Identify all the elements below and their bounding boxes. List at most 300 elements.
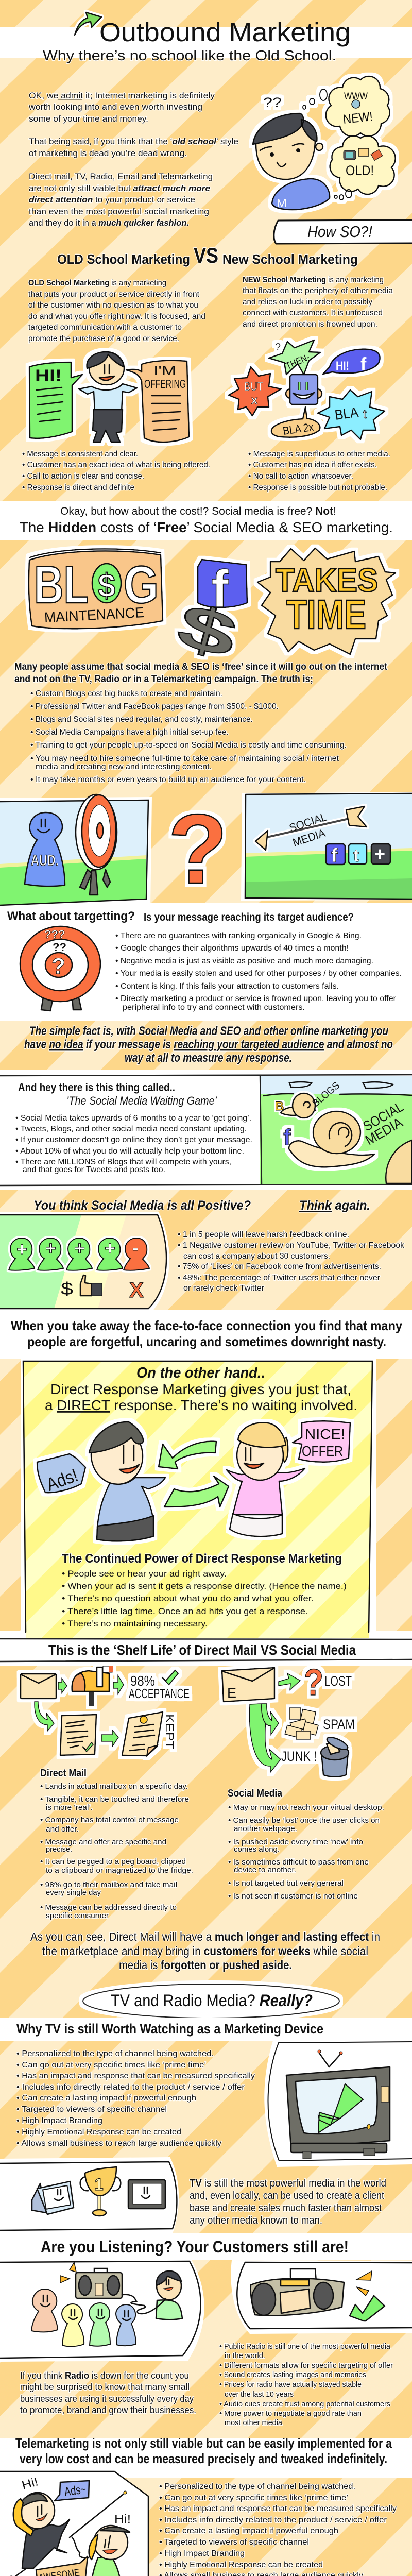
- illustration: man with ads: Ads!: [44, 1465, 81, 1495]
- list: waiting game: • Tweets, Blogs, and other social media need constant updating.: [15, 1125, 247, 1133]
- bubble: hi facebook: [323, 349, 380, 374]
- list: direct mail: • Lands in actual mailbox on a specific day.: [40, 1782, 188, 1791]
- list: tv benefits: • Has an impact and response that can be measured specifically: [16, 2072, 255, 2080]
- text: free assumption: [14, 662, 388, 685]
- illustration: direct speaker with speech boxes: [29, 352, 189, 442]
- panel: reviews figures: +: [105, 1238, 115, 1259]
- bubble: bla twitter: BLA: [334, 404, 359, 423]
- caller: Hi!: [20, 2475, 40, 2492]
- heading: waiting game: [18, 1081, 217, 1107]
- list: telemarketing benefits: • Targeted to viewers of specific channel: [159, 2538, 309, 2547]
- figure: audience: AUD.: [31, 852, 59, 869]
- heading: waiting game: ’The Social Media Waiting Game’: [66, 1094, 217, 1107]
- text: tv powerful: TV is still the most powerful media in the world: [190, 2178, 386, 2189]
- list: waiting game: • About 10% of what you do will actually help your bottom line.: [15, 1147, 244, 1156]
- heading: other hand: On the other hand..: [136, 1365, 265, 1381]
- bubble: bla 2x: BLA 2x: [282, 420, 315, 437]
- heading: hidden costs: [20, 505, 393, 535]
- illustration: snails: SOCIAL: [360, 1099, 406, 1134]
- list: new school traits: [248, 450, 390, 492]
- icons: social networks: +: [374, 843, 385, 865]
- list: direct mail: and offer.: [46, 1825, 79, 1834]
- bubble: bla twitter: t: [363, 408, 367, 421]
- text: radio success: [20, 2370, 196, 2415]
- intro text: OK, we admit it; Internet marketing is definitely: [29, 91, 215, 100]
- text: old school definition: targeted communication with a customer to: [28, 323, 182, 332]
- figure: audience: [25, 812, 65, 886]
- arrows: exchange: [159, 1442, 229, 1507]
- list: waiting game: and that goes for Tweets and posts too.: [23, 1165, 165, 1174]
- list: continued power: • There’s no question about what you do and what you offer.: [62, 1594, 314, 1603]
- list: waiting game: • Social Media takes upwards of 6 months to a year to ‘get going’.: [15, 1114, 251, 1123]
- list: negative stats: • 1 Negative customer review on YouTube, Twitter or Facebook: [178, 1241, 405, 1250]
- text: radio success: businesses are using it successfully every day: [20, 2393, 194, 2404]
- subtitle: Why there’s no school like the Old School.: [43, 47, 336, 63]
- comic panel: audience and target: [0, 794, 152, 908]
- intro text: than even the most powerful social marketing: [29, 207, 209, 216]
- list: tv benefits: • Includes info directly related to the product / service / offer: [16, 2083, 245, 2092]
- intro text: worth looking into and even worth investing: [28, 102, 202, 112]
- person: presenter: [79, 352, 137, 442]
- heading: waiting game: And hey there is this thing called..: [18, 1081, 175, 1094]
- list: waiting game: • There are MILLIONS of Blogs that will compete with yours,: [15, 1158, 231, 1166]
- text: tv powerful: any other media known to man.: [190, 2215, 322, 2226]
- list: old school traits: • Customer has an exact idea of what is being offered.: [22, 461, 210, 469]
- text: old school definition: of the customer with no question as to what you: [28, 301, 198, 310]
- icon: trophy: 1: [94, 2175, 104, 2194]
- icons: social networks: t: [353, 846, 359, 866]
- list: tv benefits: • Targeted to viewers of specific channel: [16, 2105, 167, 2114]
- list: tv benefits: • Highly Emotional Response can be created: [16, 2128, 181, 2137]
- intro text: of marketing is dead you’re dead wrong.: [29, 148, 187, 158]
- list: hidden costs: • Professional Twitter and FaceBook pages range from $500. - $1000.: [30, 702, 279, 711]
- list: direct mail: • Tangible, it can be touched and therefore: [40, 1795, 189, 1804]
- title band: [0, 27, 412, 58]
- list: direct mail: • Company has total control of message: [40, 1816, 179, 1824]
- illustration: woman with nice offer: [227, 1421, 350, 1536]
- list: radio benefits: in the world.: [225, 2351, 265, 2360]
- text: new school definition: and direct promotion is frowned upon.: [243, 320, 377, 329]
- text: tv powerful: base and create sales much faster than almost: [190, 2202, 382, 2214]
- icon: big question mark: ?: [168, 793, 228, 904]
- label: lost: ?: [304, 1662, 323, 1703]
- label: social media: [287, 810, 328, 849]
- summary text: lasting effect: As you can see, Direct Mail will have a much longer and lasting effect in: [30, 1930, 380, 1943]
- list: hidden costs: • It may take months or even years to build up an audience for your content.: [30, 775, 306, 784]
- title: Outbound Marketing: [99, 18, 351, 47]
- list: social media: • May or may not reach your virtual desktop.: [228, 1803, 384, 1812]
- list: tv benefits: • Allows small business to reach large audience quickly: [16, 2139, 221, 2148]
- list: tv benefits: • Personalized to the type of channel being watched.: [16, 2049, 214, 2058]
- thought cloud: new: NEW!: [342, 109, 373, 127]
- text: old school definition: OLD School Marketing is any marketing: [28, 279, 166, 287]
- list: targeting issues: • Your media is easily stolen and used for other purposes / by other companies.: [115, 969, 402, 978]
- list: social media: • Is not targeted but very general: [228, 1879, 344, 1888]
- panel: reviews figures: +: [74, 1238, 85, 1259]
- panel: number one tv: [0, 2157, 179, 2234]
- list: radio benefits: • Sound creates lasting images and memories: [219, 2370, 366, 2379]
- illustration: unfocused social media chatter: [229, 340, 385, 439]
- intro text: Direct mail, TV, Radio, Email and Telemarketing: [29, 172, 213, 181]
- small thought bubbles: [303, 89, 352, 200]
- list: social media: [228, 1788, 384, 1901]
- callout: simple fact: [24, 1024, 393, 1065]
- email envelope: [222, 1668, 274, 1702]
- icon: tv right: [128, 2180, 165, 2209]
- heading: targetting: [7, 909, 354, 923]
- list: targeting issues: • Content is king. If this fails your attraction to customers fails.: [115, 982, 339, 991]
- list: radio benefits: • More power to negotiate a good rate than: [219, 2409, 362, 2418]
- callee: Hi!: [114, 2512, 131, 2526]
- trash can: [321, 1735, 349, 1777]
- icon: paid like: $: [61, 1279, 73, 1299]
- list: direct mail: to a clipboard or magnetized to the fridge.: [46, 1866, 193, 1875]
- list: direct mail: • Message can be addressed directly to: [40, 1903, 177, 1912]
- list: telemarketing benefits: [159, 2482, 397, 2576]
- icon: boombox small: [60, 2262, 122, 2298]
- question marks: ??: [263, 95, 282, 110]
- label: acceptance: 98%: [130, 1673, 155, 1689]
- list: telemarketing benefits: • Includes info directly related to the product / service / offer: [159, 2516, 387, 2524]
- label: acceptance: ACCEPTANCE: [129, 1686, 190, 1701]
- list: social media: • Can easily be ‘lost’ once the user clicks on: [228, 1816, 380, 1825]
- statement: face to face: [11, 1318, 402, 1349]
- text: old school definition: do and what you offer right now. It is focused, and: [28, 312, 205, 321]
- callout: tv and radio: [83, 1984, 339, 2018]
- list: new school traits: • No call to action whatsoever.: [248, 472, 353, 481]
- list: direct mail: every single day: [46, 1888, 101, 1897]
- email envelope: E: [227, 1685, 236, 1701]
- bubble: then: ?: [275, 342, 281, 353]
- list: direct mail: is more ‘real’.: [46, 1803, 93, 1812]
- green arrows: [250, 1673, 300, 1772]
- comic panel: social media arrow: [241, 792, 412, 901]
- list: continued power: • There’s no maintaining necessary.: [62, 1619, 208, 1629]
- illustration: blog maintenance sign: G: [124, 555, 159, 614]
- list: tv benefits: [16, 2049, 255, 2148]
- list: negative stats: [178, 1230, 405, 1293]
- summary text: lasting effect: the marketplace and may bring in customers for weeks while social: [42, 1944, 368, 1958]
- list: radio benefits: • Audio cues create trust among potential customers: [219, 2400, 390, 2409]
- list: direct mail: specific consumer: [46, 1911, 109, 1920]
- illustration: snails: B: [275, 1099, 284, 1113]
- list: targeting issues: • Google changes their algorithms upwards of 40 times a month!: [115, 944, 349, 953]
- list: tv benefits: • High Impact Branding: [16, 2116, 102, 2125]
- panel: boombox check: [231, 2260, 412, 2334]
- list: targeting issues: peripheral info to try and connect with customers.: [123, 1003, 305, 1012]
- person: hair: [253, 113, 317, 144]
- label: junk: JUNK !: [281, 1749, 317, 1764]
- icon: target with question marks: [20, 926, 100, 1011]
- heading: old vs new: VS: [194, 243, 218, 267]
- icon: target with question marks: ??: [53, 941, 66, 954]
- list: telemarketing benefits: • Can go out at very specific times like ‘prime time’: [159, 2494, 348, 2502]
- speech box: hi: [29, 362, 82, 438]
- list: negative stats: • 48%: The percentage of Twitter users that either never: [178, 1274, 381, 1282]
- list: hidden costs: • Training to get your people up-to-speed on Social Media is costly and time consuming.: [30, 741, 347, 750]
- list: continued power: The Continued Power of Direct Response Marketing: [62, 1552, 342, 1566]
- text: new school definition: and relies on luck in order to possibly: [243, 298, 372, 307]
- text: new school definition: [243, 276, 393, 329]
- list: targeting issues: • Negative media is just as visible as positive and much more damaging.: [115, 957, 373, 965]
- illustration: takes time burst: [258, 548, 396, 654]
- heading: are you listening: Are you Listening? Your Customers still are!: [41, 2238, 349, 2256]
- icons: signal triangles: [356, 2271, 372, 2296]
- list: direct mail: precise.: [46, 1845, 72, 1854]
- bubble: but: [229, 367, 281, 416]
- illustration: social media flow: [222, 1662, 355, 1777]
- illustration: thinking marketer with clouds: M: [277, 197, 287, 210]
- list: hidden costs: • Social Media Campaigns have a high initial set-up fee.: [30, 728, 229, 737]
- text: tv powerful: [190, 2178, 386, 2226]
- thought cloud: old: OLD!: [346, 163, 374, 178]
- list: social media: • Is not seen if customer is not online: [228, 1892, 358, 1901]
- bubble: but: BUT: [244, 380, 263, 393]
- list: continued power: [62, 1552, 347, 1629]
- list: new school traits: • Message is superfluous to other media.: [248, 450, 390, 459]
- figures: listeners: [31, 2289, 136, 2346]
- label: acceptance: [129, 1670, 190, 1701]
- heading: other hand: Direct Response Marketing gives you just that,: [50, 1381, 351, 1397]
- text: new school definition: NEW School Marketing is any marketing: [243, 276, 384, 284]
- icon: tv: [286, 2050, 390, 2159]
- thought cloud: new: [326, 76, 390, 137]
- illustration: blog maintenance sign: BL: [34, 555, 89, 614]
- illustration: snails: f: [283, 1125, 291, 1150]
- list: direct mail: • Message and offer are specific and: [40, 1838, 166, 1846]
- text: free assumption: and not on the TV, Radio or in a Telemarketing campaign. The truth is;: [14, 674, 313, 685]
- illustration: woman with nice offer: OFFER: [302, 1443, 343, 1459]
- icons: social networks: [326, 843, 390, 867]
- illustration: direct mail flow: [21, 1666, 190, 1756]
- list: targeting issues: • Directly marketing a product or service is frowned upon, leaving you to offer: [115, 994, 397, 1003]
- list: hidden costs: • Custom Blogs cost big bucks to create and maintain.: [30, 689, 222, 698]
- envelope: [21, 1674, 56, 1699]
- intro text: [28, 91, 238, 228]
- label: social media: SOCIAL: [287, 810, 328, 835]
- list: old school traits: • Call to action is clear and concise.: [22, 472, 144, 481]
- figure: radio host: [122, 2271, 182, 2319]
- list: negative stats: or rarely check Twitter: [183, 1284, 265, 1293]
- heading: why tv: Why TV is still Worth Watching as a Marketing Device: [16, 2021, 323, 2037]
- illustration: facebook dollar: $: [170, 590, 244, 671]
- text: radio success: to promote, brand and grow their businesses.: [20, 2404, 196, 2415]
- summary text: lasting effect: [30, 1930, 380, 1972]
- list: radio benefits: [219, 2342, 393, 2427]
- icon: trophy: [80, 2167, 121, 2216]
- text: old school definition: promote the purchase of a good or service.: [28, 334, 179, 343]
- list: negative stats: • 1 in 5 people will leave harsh feedback online.: [178, 1230, 349, 1239]
- heading: other hand: [45, 1365, 357, 1413]
- list: old school traits: • Message is consistent and clear.: [22, 450, 138, 459]
- heading: hidden costs: The Hidden costs of ‘Free’ Social Media & SEO marketing.: [20, 519, 393, 535]
- list: direct mail: • 98% go to their mailbox and take mail: [40, 1880, 177, 1889]
- text: radio success: might be surprised to know that many small: [20, 2381, 190, 2392]
- speech: awesome offer: [36, 2556, 88, 2576]
- illustration: man with ads: [37, 1422, 165, 1541]
- text: new school definition: connect with customers. It is unfocused: [243, 309, 383, 317]
- list: social media: comes along.: [234, 1845, 280, 1854]
- list: tv benefits: • Can go out at very specific times like ‘prime time’: [16, 2061, 206, 2070]
- bubble: bla 2x: [271, 407, 320, 437]
- icon: orange x: X: [129, 1278, 144, 1302]
- speech box: offering: OFFERING: [144, 377, 186, 391]
- figures: positive and negative: [9, 1238, 149, 1270]
- summary text: lasting effect: media is forgotten or pushed aside.: [119, 1958, 292, 1972]
- label: spam: SPAM: [323, 1717, 355, 1732]
- panel: radio audience: [0, 2260, 204, 2362]
- bubble: then: [269, 340, 320, 375]
- callee: [72, 2512, 131, 2576]
- heading: other hand: a DIRECT response. There’s no waiting involved.: [45, 1397, 357, 1413]
- list: hidden costs: • You may need to hire someone full-time to take care of maintaining social / internet: [30, 754, 339, 763]
- panel: telemarketing call: [0, 2471, 148, 2576]
- intro text: some of your time and money.: [29, 114, 148, 124]
- kept document: KEPT: [163, 1714, 176, 1749]
- speech: ads: Ads~: [63, 2482, 87, 2499]
- speech box: offering: I'M: [153, 364, 176, 378]
- illustration: blog maintenance sign: MAINTENANCE: [44, 604, 145, 625]
- list: radio benefits: • Different formats allow for specific targeting of offer: [219, 2361, 393, 2370]
- list: radio benefits: over the last 10 years: [225, 2390, 294, 2399]
- icon: green arrow: [75, 12, 101, 35]
- callout: simple fact: have no idea if your message is reaching your targeted audience and almost no: [24, 1038, 393, 1052]
- list: radio benefits: most other media: [225, 2418, 283, 2427]
- speech box: offering: [126, 361, 189, 442]
- text: free assumption: Many people assume that social media & SEO is ‘free’ since it will go out on the internet: [14, 662, 388, 672]
- character: device: [286, 375, 322, 404]
- icon: target with question marks: ???: [44, 928, 65, 941]
- panel: waiting game: [0, 1075, 412, 1185]
- person: body: [272, 179, 330, 210]
- heading: old vs new: OLD School Marketing: [57, 251, 190, 267]
- spam envelopes: [285, 1708, 318, 1739]
- arrows: [35, 1675, 124, 1747]
- bubble: then: THEN-: [284, 352, 311, 372]
- text: tv powerful: and, even locally, can be used to create a client: [190, 2190, 384, 2201]
- illustration: takes time burst: TIME: [286, 591, 366, 637]
- illustration: snails: BLOGS: [311, 1080, 342, 1109]
- illustration: snails: MEDIA: [363, 1114, 405, 1148]
- list: direct mail: Direct Mail: [40, 1768, 87, 1779]
- thought cloud: old: [330, 136, 396, 194]
- list: hidden costs: media and creating new and interesting content.: [36, 762, 212, 771]
- caller: [13, 2475, 70, 2568]
- speech: ads: [55, 2481, 89, 2501]
- text: old school definition: that puts your product or service directly in front: [28, 290, 200, 299]
- list: direct mail: • It can be pegged to a peg board, clipped: [40, 1857, 186, 1866]
- list: direct mail: [40, 1768, 193, 1920]
- intro text: direct attention to your product or service: [29, 195, 195, 205]
- kept document: [122, 1712, 176, 1756]
- bubble: hi facebook: f: [360, 354, 367, 374]
- list: continued power: • There’s little lag time. Once an ad hits you get a response.: [62, 1606, 308, 1616]
- intro text: That being said, if you think that the ‘old school’ style: [29, 137, 238, 146]
- panel: direct response: [21, 1359, 376, 1638]
- heading: old vs new: [57, 243, 358, 267]
- list: radio benefits: • Public Radio is still one of the most powerful media: [219, 2342, 391, 2351]
- heading: shelf life band: [0, 1639, 412, 1662]
- illustration: facebook dollar: [170, 560, 247, 671]
- list: radio benefits: • Prices for radio have actually stayed stable: [219, 2380, 362, 2389]
- list: old school traits: • Response is direct and definite: [22, 483, 134, 492]
- intro text: and they do it in a much quicker fashion.: [29, 218, 189, 228]
- list: negative stats: • 75% of ‘Likes’ on Facebook come from advertisements.: [178, 1262, 381, 1271]
- statement: telemarketing: [15, 2435, 392, 2466]
- list: social media: • Is sometimes difficult to pass from one: [228, 1858, 369, 1867]
- heading: targetting: Is your message reaching its target audience?: [144, 911, 354, 923]
- mailbox: [72, 1666, 113, 1706]
- illustration: woman with nice offer: NICE!: [305, 1426, 345, 1442]
- thought cloud: new: WWW: [344, 91, 368, 102]
- illustration: thinking marketer with clouds: [253, 76, 396, 210]
- label: lost: [304, 1662, 352, 1703]
- bubble: bla twitter: [318, 390, 385, 439]
- illustration: blog maintenance sign: $: [98, 567, 115, 604]
- callout: simple fact: way at all to measure any response.: [125, 1051, 292, 1065]
- callout: How so: How SO?!: [307, 223, 372, 241]
- callout: tv and radio: TV and Radio Media? Really?: [111, 1991, 313, 2010]
- icon: paid like: [61, 1275, 102, 1299]
- list: telemarketing benefits: • Has an impact and response that can be measured specifically: [159, 2504, 397, 2513]
- icons: social networks: f: [331, 845, 338, 867]
- person: head: [256, 117, 315, 179]
- illustration: facebook dollar: f: [211, 560, 229, 618]
- list: hidden costs: • Blogs and Social sites need regular, and costly, maintenance.: [30, 715, 253, 724]
- icon: target on stand: [76, 794, 117, 895]
- list: tv benefits: • Can create a lasting impact if powerful enough: [16, 2094, 196, 2103]
- list: social media: • Is pushed aside every time ‘new’ info: [228, 1838, 363, 1846]
- list: targeting issues: • There are no guarantees with ranking organically in Google & Bing.: [115, 931, 362, 940]
- text: new school definition: that floats on the periphery of other media: [243, 286, 393, 295]
- callout: How so: [274, 220, 412, 244]
- icon: target with question marks: ?: [52, 954, 65, 979]
- text: radio success: If you think Radio is down for the count you: [20, 2370, 189, 2381]
- list: telemarketing benefits: • High Impact Branding: [159, 2549, 245, 2558]
- list: telemarketing benefits: • Personalized to the type of channel being watched.: [159, 2482, 355, 2491]
- heading: hidden costs: Okay, but how about the cost!? Social media is free? Not!: [60, 505, 336, 517]
- text: old school definition: [28, 279, 205, 343]
- list: new school traits: • Response is possible but not probable.: [248, 483, 387, 492]
- intro text: are not only still viable but attract much more: [29, 183, 210, 193]
- icon: boombox large: [251, 2269, 344, 2316]
- panel: reviews figures: [0, 1212, 169, 1312]
- panel: reviews figures: +: [16, 1239, 27, 1260]
- panel: reviews figures: -: [132, 1237, 139, 1258]
- illustration: snails: [0, 1075, 412, 1185]
- speech box: hi: HI!: [35, 366, 62, 385]
- illustration: blog maintenance sign: [29, 549, 163, 629]
- document: [60, 1715, 96, 1755]
- icon: tv left: [32, 2181, 74, 2214]
- list: waiting game: [15, 1114, 252, 1174]
- list: social media: another webpage.: [234, 1824, 297, 1833]
- list: social media: Social Media: [228, 1788, 283, 1799]
- list: new school traits: • Customer has no idea if offer exists.: [248, 461, 377, 469]
- list: social media: device to another.: [234, 1866, 296, 1874]
- panel: tv check: [264, 2039, 412, 2167]
- list: negative stats: can cost a company about 30 customers.: [183, 1252, 330, 1261]
- list: hidden costs: [30, 689, 347, 784]
- heading: think again: Think again.: [299, 1198, 370, 1213]
- label: lost: LOST: [324, 1673, 352, 1689]
- list: old school traits: [22, 450, 210, 492]
- panel: reviews figures: +: [45, 1238, 56, 1259]
- list: waiting game: • If your customer doesn’t go online they don’t get your message.: [15, 1136, 252, 1144]
- icon: check: [350, 2296, 385, 2321]
- bubble: hi facebook: HI!: [336, 359, 349, 373]
- bubble: but: x: [251, 394, 258, 406]
